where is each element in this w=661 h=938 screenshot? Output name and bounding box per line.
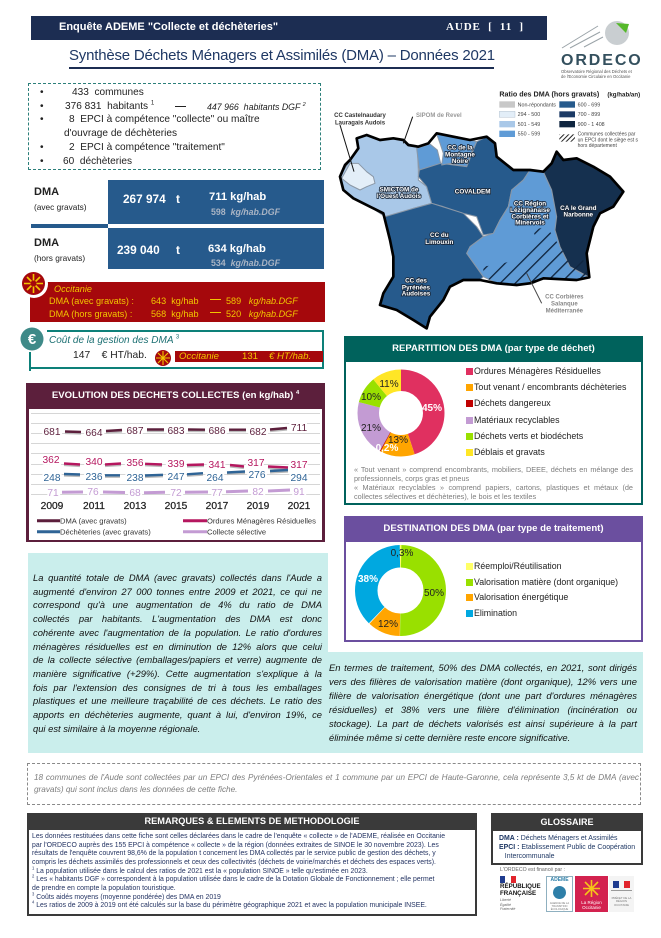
region labels: Pyrénées [402,284,431,291]
icon: euro [20,328,44,350]
external EPCI labels: CC Corbières [545,295,584,301]
glossary text: Intercommunale [505,853,555,860]
remarks text: 3 Coûts aidés moyens (moyenne pondérée) des DMA en 2019 [32,891,221,901]
panel: destination [344,516,643,642]
répartition legend: Matériaux recyclables [474,415,560,425]
glossary heading [491,813,643,831]
map legend: 294 - 500 [518,112,540,118]
survey name: Enquête ADEME "Collecte et déchèteries" [59,21,278,33]
commentary: evolution: collectés par habitants. L'augmentation des DMA est donc [33,613,322,624]
DMA with rubble panel: t [176,192,180,206]
logo: ADEME: AGENCE DE LA TRANSITION ÉCOLOGIQUE [550,902,569,911]
region labels: SMICTOM de [380,186,419,193]
DMA with rubble panel: 711 kg/hab [209,191,266,203]
répartition notes: collectes sélectives et déchèteries), le bois et les textiles [354,492,536,501]
series: déchèteries [64,470,288,476]
data labels: 317 [290,460,308,471]
DMA without rubble panel: t [176,243,180,257]
region labels: Montagne [445,151,475,158]
donut: destination: 50% [424,588,444,599]
icon: Occitanie cross small [155,350,171,366]
Occitanie panel: Occitanie [54,284,92,294]
glossary heading: GLOSSAIRE [540,817,594,827]
data labels: 71 [47,488,59,499]
remarks heading [27,813,477,830]
region labels: CC de la [447,145,473,152]
logo: Région Occitanie [575,876,608,912]
DMA with rubble label: DMA [34,186,59,198]
department outline [340,133,623,328]
map legend: Communes collectées par [578,132,636,138]
map legend: Ratio des DMA (hors gravats) [499,91,600,99]
donut: répartition: 13% [388,435,408,446]
donut: répartition [358,370,444,456]
glossary text [499,834,635,860]
chart legend: Déchèteries (avec gravats) [60,528,151,536]
Occitanie cost strip: 131 [242,351,258,362]
logo: Région Occitanie: La Région [581,900,602,905]
commentary: evolution: ménagères résiduelles est en diminution de 12% alors que celui [33,641,322,652]
donut: destination: 38% [358,574,378,585]
map legend: 501 - 549 [518,122,540,128]
series: OMR [64,464,288,468]
répartition legend [466,366,626,457]
map [334,91,640,330]
Occitanie panel: DMA (avec gravats) : [49,296,134,306]
remarks text: par l'ORDECO auprès des 155 EPCI à compétence « collecte » de la région (données extraites de SINOE le 30 novembre 2023). Les [32,842,439,849]
commentary: evolution: apports en déchèteries augmente, quant à lui, d'environ 19%, ce [33,709,322,720]
cost value: 147 € HT/hab. [73,350,147,361]
Occitanie cost strip: € HT/hab. [269,351,311,362]
funders: French Republic: RÉPUBLIQUE [500,883,541,890]
remarks text: 1 La population utilisée dans le calcul des ratios de 2021 est la « population SINOE » telle qu'estimée en 2023. [32,865,368,875]
department tag: AUDE [ 11 ] [446,21,524,33]
data labels: 340 [86,457,103,468]
ORDECO logo: ORDECO [561,52,643,69]
data labels: 711 [291,423,307,434]
donut: répartition: 10% [361,392,381,403]
map legend: hors département [578,143,617,149]
key figures box: • [40,101,44,112]
commentary: evolution: qui est similaire à la moyenne régionale. [33,723,200,734]
funders: French Republic: FRANÇAISE [500,890,536,897]
data labels: 248 [44,473,61,484]
répartition legend: Déchets verts et biodéchets [474,431,583,441]
region labels: Audoises [402,291,431,298]
key figures box [28,83,321,170]
data labels: 356 [126,458,144,469]
map regions [340,134,623,328]
destination heading: DESTINATION DES DMA (par type de traitement) [383,523,604,534]
year axis: 2009 [41,501,64,512]
commentary: treatment: éliminée même si cette dernière reste encore significative. [329,732,570,743]
key figures box: • [40,87,44,98]
key figures box: 60 déchèteries [63,156,132,167]
DMA without rubble panel: 634 kg/hab [208,243,266,255]
note: out-of-department communes [27,763,641,805]
ORDECO logo [561,21,643,79]
funders: French Republic: Égalité [500,903,511,907]
key figures box: 433 communes [72,87,144,98]
map legend: (kg/hab/an) [607,92,640,99]
data labels [42,423,308,499]
key figures box: 2 EPCI à compétence "traitement" [69,142,225,153]
key figures box: • [40,142,44,153]
year axis: 2015 [165,501,188,512]
data labels: 264 [206,473,224,484]
DMA without rubble panel: 534 kg/hab.DGF [211,258,280,268]
chart legend: Collecte sélective [207,528,266,536]
répartition legend: Déblais et gravats [474,447,545,457]
donut: destination: 0,3% [391,548,414,559]
DMA without rubble panel [108,228,324,269]
map legend: 900 - 1 408 [578,122,605,128]
region labels: Noire [452,158,469,165]
map legend: 550 - 599 [518,132,540,138]
note: out-of-department communes: 18 communes de l'Aude sont collectées par un EPCI des Pyrénées-Orientales et 1 commune par un EPCI de Haute-Garonne, cela représente 3,5 kt de DMA (avec [34,773,639,782]
icon: euro: € [28,331,37,348]
region labels: l'Ouest Audois [377,193,422,200]
destination legend: Valorisation énergétique [474,592,568,602]
region labels: CA le Grand [560,205,597,212]
Occitanie panel: 643 kg/hab [151,296,199,306]
glossary text: DMA : Déchets Ménagers et Assimilés [499,835,618,842]
title: Synthèse Déchets Ménagers et Assimilés (DMA) – Données 2021 [69,47,495,64]
répartition legend: Ordures Ménagères Résiduelles [474,366,601,376]
region labels: Minervois [515,219,545,226]
remarks text: de prendre en compte la population touristique. [32,885,176,892]
glossary text: EPCI : Etablissement Public de Coopération [499,844,635,851]
data labels: 236 [86,472,103,483]
external EPCI labels: Lauragais Audois [335,120,386,126]
commentary: treatment: stockage). La part de déchets valorisés est ainsi supérieure à la part [329,718,637,729]
year axis: 2011 [83,501,105,512]
funders: French Republic: Fraternité [500,907,515,911]
data labels: 681 [44,427,61,438]
data labels: 317 [248,458,265,469]
year axis: 2021 [288,501,311,512]
note: out-of-department communes: gravats) qui sont inclus dans les données de cette fiche. [34,785,237,794]
commentary: evolution: plastiques et une meilleure traçabilité de ces déchets. Le ratio des [33,695,322,706]
remarks text: 2 Les « habitants DGF » correspondent à la population utilisée dans le cadre de la Dotation Globale de Fonctionnement ; elle permet [32,874,434,883]
cost panel [29,330,324,369]
cost heading: Coût de la gestion des DMA 3 [49,335,179,346]
ORDECO logo: de l'Economie Circulaire en Occitanie [561,74,631,79]
remarks text: compris les déchets assimilés des professionnels et ceux des collectivités (déchets de voirie/marchés et déchets des espaces verts). [32,859,436,866]
DMA without rubble panel: 239 040 [117,243,160,257]
chart [31,413,320,536]
DMA without rubble label [34,237,85,263]
Occitanie panel: 520 kg/hab.DGF [226,309,298,319]
Occitanie cost strip: Occitanie [179,351,219,362]
region labels: CC Région [514,200,546,207]
map legend [499,91,640,149]
region labels: Corbières et [512,213,549,220]
DMA without rubble label: DMA [34,237,59,249]
series: collecte sélective [62,490,290,493]
répartition heading: REPARTITION DES DMA (par type de déchet) [392,343,595,354]
funders: French Republic [500,867,565,911]
panel: répartition [344,336,643,505]
répartition notes [354,465,633,501]
logo: Région Occitanie: Occitanie [582,905,601,910]
external EPCI labels: Méditerranée [546,309,584,315]
data labels: 91 [293,487,305,498]
chart legend: Ordures Ménagères Résiduelles [207,516,316,526]
DMA with rubble panel: 267 974 [123,192,166,206]
commentary: treatment [327,652,643,753]
series: DMA [65,428,287,432]
region labels: Narbonne [564,212,594,219]
répartition heading [344,336,643,362]
region labels [377,145,597,298]
year axis [41,501,311,512]
data labels: 76 [87,487,99,498]
logo: French State: PRÉFET DE LA RÉGION OCCITANIE [612,896,631,907]
map legend: 600 - 699 [578,102,600,108]
répartition notes: professionnels, corps gras et pneus [354,474,469,483]
DMA with rubble panel [108,180,324,224]
chart heading [26,383,325,409]
data labels: 238 [126,473,144,484]
data labels: 294 [290,473,308,484]
external EPCI labels: CC Castelnaudary [334,113,387,119]
logo: ADEME [546,876,573,912]
donut: répartition: 0,2% [376,443,399,454]
external EPCI labels: SIPOM de Revel [416,113,462,119]
répartition legend: Déchets dangereux [474,398,551,408]
icon: Occitanie cross [22,272,48,298]
chart heading: EVOLUTION DES DECHETS COLLECTES (en kg/hab) 4 [52,390,299,401]
destination heading [344,516,643,542]
destination legend: Valorisation matière (dont organique) [474,577,618,587]
remarks heading: REMARQUES & ELEMENTS DE METHODOLOGIE [145,816,359,826]
data labels: 683 [168,426,185,437]
DMA with rubble label: (avec gravats) [34,202,87,212]
chart legend [37,516,316,536]
funders: French Republic: Liberté [500,898,511,902]
chart legend: DMA (avec gravats) [60,516,127,526]
year axis: 2017 [206,501,229,512]
data labels: 72 [170,488,182,499]
funders: French Republic: L'ORDECO est financé par : [500,867,565,873]
commentary: treatment: filière de valorisation énergétique (dont une part d'ordures ménagères [329,690,637,701]
donut: répartition: 45% [422,403,442,414]
répartition notes: « Tout venant » comprend encombrants, mobiliers, DEEE, déchets en mélange des [354,465,633,474]
data labels: 82 [252,487,264,498]
remarks text: résultats de l'enquête couvrent 98,6% de la population t concernent les DMA collectés par le service public de gestion des déchets, y [32,850,436,857]
panel: remarks [27,813,477,916]
répartition legend: Tout venant / encombrants déchèteries [474,382,626,392]
header bar [31,16,547,40]
panel: glossary [491,813,643,865]
key figures box: • [40,114,44,125]
donut: destination: 12% [378,619,398,630]
destination legend: Réemploi/Réutilisation [474,561,562,571]
region labels: CC du [430,232,449,239]
remarks text: Les données restituées dans cette fiche sont celles déclarées dans le cadre de l'enquête « collecte » de l'ADEME, réalisée en Occitanie [32,833,445,840]
logo: French State [609,876,634,912]
region labels: Lézignanaise [510,207,550,214]
commentary: evolution [28,553,328,753]
region labels: COVALDEM [455,189,491,196]
destination legend [466,561,618,618]
data labels: 664 [86,428,103,439]
external EPCI labels: Salanque [551,302,578,308]
data labels: 68 [129,488,141,499]
map legend: 700 - 899 [578,112,600,118]
key figures box: 8 EPCI à compétence "collecte" ou maître [69,114,260,125]
commentary: evolution: de la collecte sélective (emballages/papiers et verre) augmente de [33,654,322,665]
external EPCI labels [334,113,584,315]
destination legend: Elimination [474,608,517,618]
key figures box: 447 966 habitants DGF 2 [207,102,306,112]
DMA without rubble label: (hors gravats) [34,253,85,263]
remarks text: 4 Les ratios de 2009 à 2019 ont été calculés sur la base du périmètre géographique 2021 et avec la population municipale INSEE. [32,900,427,909]
data labels: 686 [208,426,226,437]
key figures box: 376 831 habitants 1 [65,101,154,112]
map legend: un EPCI dont le siège est s [578,137,638,143]
commentary: evolution: cohérente avec l'augmentation de la population. Le ratio d'ordures [33,627,322,638]
donut: répartition: 11% [379,379,399,390]
data labels: 77 [211,488,223,499]
DMA with rubble panel: 598 kg/hab.DGF [211,207,280,217]
donut: répartition: 21% [361,423,381,434]
commentary: evolution: correspond qu'à une augmentation de 4% du ratio de DMA [33,599,322,610]
key figures box: d'ouvrage de déchèteries [64,128,177,139]
data labels: 687 [126,426,144,437]
logo: ADEME: ADEME [550,877,569,883]
commentary: evolution: fois par l'extension des consignes de tri à tous les emballages [33,682,322,693]
line chart panel [26,383,325,542]
commentary: treatment: En termes de traitement, 50% des DMA collectés, en 2021, sont dirigés [329,662,637,673]
year axis: 2013 [124,501,147,512]
map legend: Non-répondants [518,102,556,108]
data labels: 362 [42,455,60,466]
region labels: CC des [405,278,427,285]
data labels: 247 [168,472,185,483]
data labels: 341 [208,460,226,471]
commentary: treatment: résiduelles) et 38% vers une filière d'élimination (incinération ou [329,704,637,715]
commentary: evolution: manière significative (+29%). Cette augmentation s'explique à la [33,668,322,679]
Occitanie panel: DMA (hors gravats) : [49,309,132,319]
Occitanie cost strip [175,351,323,362]
key figures box: • [40,156,44,167]
year axis: 2019 [247,501,270,512]
region labels: Limouxin [425,239,454,246]
commentary: evolution: augmenté d'environ 27 000 tonnes entre 2009 et 2021, ce qui ne [33,586,322,597]
Occitanie panel [30,282,325,322]
remarks text [32,832,445,909]
répartition notes: « Matériaux recyclables » comprend papiers, cartons, plastiques et métaux (de [354,483,633,492]
data labels: 276 [248,470,266,481]
Occitanie panel: 568 kg/hab [151,309,199,319]
ORDECO logo: Observatoire Régional des Déchets et [561,69,633,74]
commentary: treatment: vers des filières de valorisation matière (dont organique), 12% vers une [329,676,637,687]
data labels: 339 [168,459,185,470]
Occitanie panel: 589 kg/hab.DGF [226,296,298,306]
data labels: 682 [250,427,267,438]
donut: destination [355,545,446,636]
DMA with rubble label [31,186,108,228]
commentary: evolution: La quantité totale de DMA (avec gravats) collectés dans l'Aude a [33,572,322,583]
